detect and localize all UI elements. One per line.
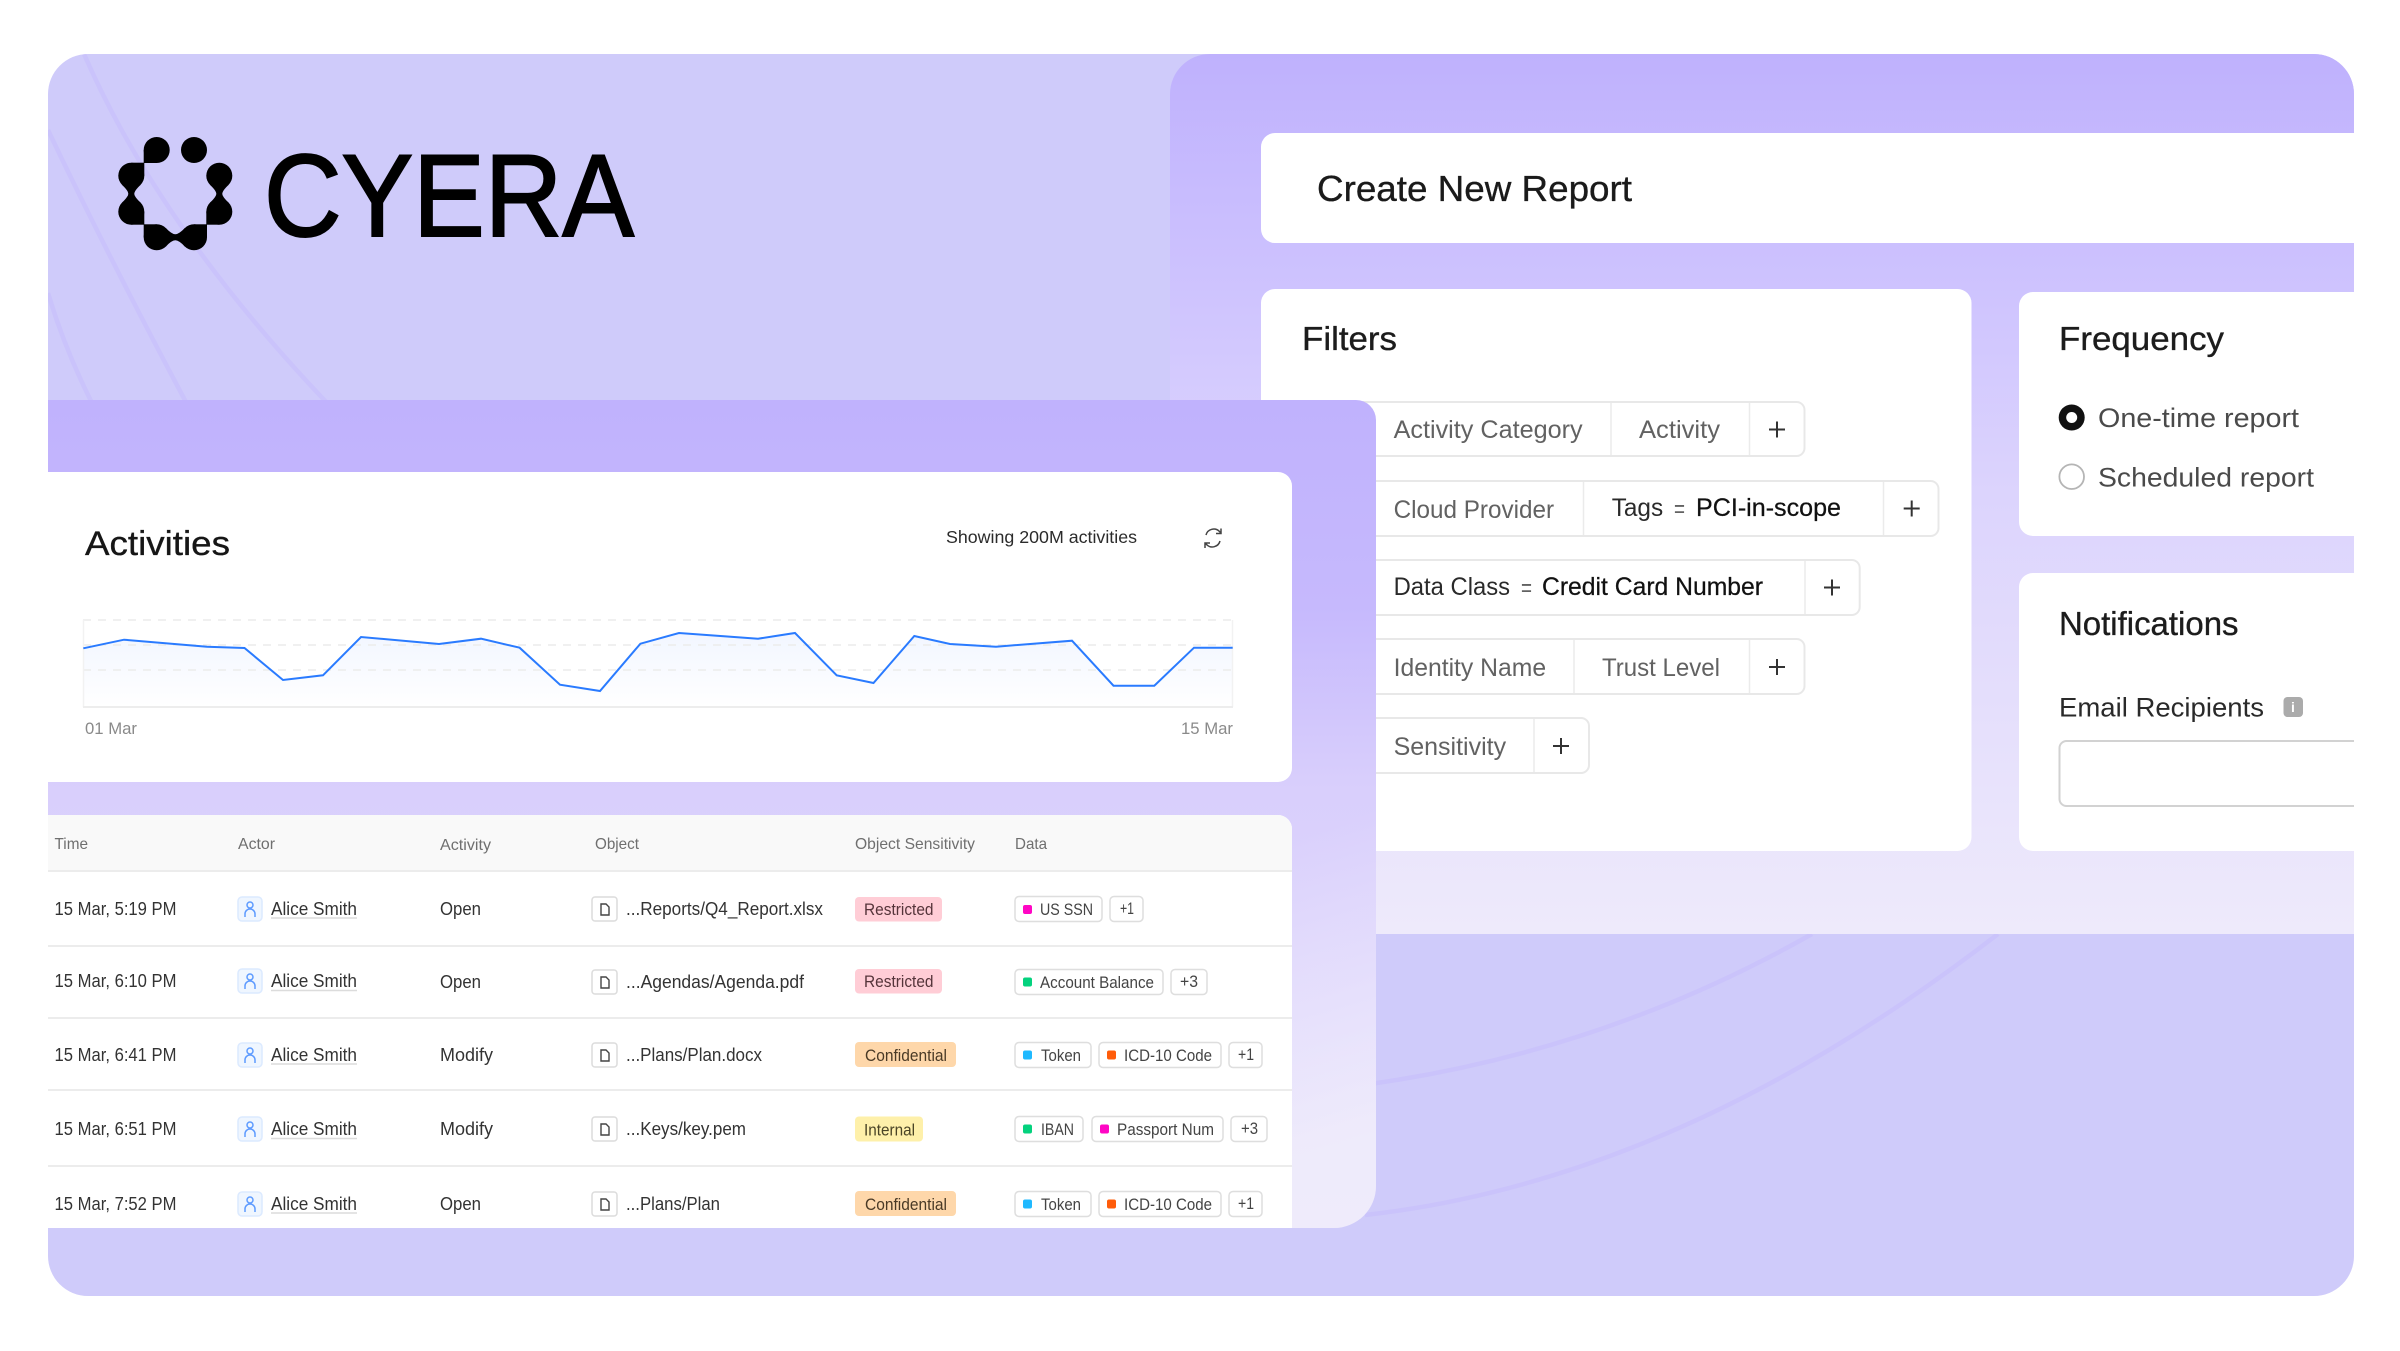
table row 2: Open (440, 972, 481, 992)
filter row 4: Trust Level (1602, 654, 1720, 682)
filter row 5: Sensitivity (1394, 733, 1507, 761)
table row 5: ...Plans/Plan (626, 1194, 720, 1214)
filter row 2: PCI-in-scope (1696, 494, 1841, 522)
icon: info badge (2284, 697, 2303, 717)
heading: create new report: Create New Report (1317, 168, 1632, 209)
heading: filters: Filters (1302, 320, 1397, 357)
table header: Time (54, 836, 88, 853)
filter row 2: = (1674, 495, 1685, 523)
axis label: start date: 01 Mar (85, 720, 138, 738)
table row 2: +3 (1180, 973, 1198, 991)
panel: activities backdrop (48, 400, 1376, 1228)
table row 4: +3 (1241, 1120, 1258, 1138)
table row 5: +1 (1238, 1195, 1254, 1213)
table row 3: 15 Mar, 6:41 PM (54, 1045, 176, 1065)
filter row 2: Cloud Provider (1394, 496, 1554, 524)
panel: activities table (48, 815, 1292, 1228)
panel: filters (1261, 289, 1972, 851)
heading: activities: Activities (85, 525, 230, 563)
filter row 4: Identity Name (1394, 654, 1546, 682)
table row 2 (54, 969, 1207, 994)
table row 4: IBAN (1041, 1121, 1074, 1139)
table row 4: 15 Mar, 6:51 PM (54, 1119, 176, 1139)
filter row 1: Activity Category (1394, 416, 1583, 444)
radio selected: one-time report: One-time report (2098, 403, 2300, 433)
background arcs top left (48, 54, 329, 405)
table row 5: Open (440, 1194, 481, 1214)
table row 4 (54, 1116, 1267, 1142)
table row 3: ...Plans/Plan.docx (626, 1045, 762, 1065)
panel: create new report header (1261, 133, 2354, 243)
table row 3: ICD-10 Code (1124, 1047, 1212, 1065)
panel: report builder backdrop (1170, 54, 2380, 934)
table header: Activity (440, 837, 491, 854)
label: email recipients: Email Recipients (2059, 692, 2264, 722)
table row 3: Confidential (865, 1047, 947, 1065)
table row 3: Token (1041, 1047, 1081, 1065)
icon: refresh (1205, 528, 1221, 548)
panel: frequency (2019, 292, 2354, 536)
table row 5: ICD-10 Code (1124, 1196, 1212, 1214)
table header: Object (595, 836, 640, 853)
table row 5: 15 Mar, 7:52 PM (54, 1194, 176, 1214)
table row 3: Alice Smith (271, 1045, 357, 1065)
table row 4: Internal (864, 1122, 915, 1140)
table row 4: Alice Smith (271, 1119, 357, 1139)
table row 2: Alice Smith (271, 971, 357, 991)
table row 5: Confidential (865, 1196, 947, 1214)
panel: notifications (2019, 573, 2380, 851)
text: showing count: Showing 200M activities (946, 527, 1137, 547)
filter row 3 (1340, 560, 1860, 615)
table row 2: Restricted (864, 973, 934, 991)
filter row 1 (1340, 402, 1804, 456)
table row 2: ...Agendas/Agenda.pdf (626, 972, 805, 992)
table row 3: Modify (440, 1045, 493, 1065)
table row 4: Modify (440, 1119, 493, 1139)
line chart (83, 620, 1234, 738)
table header: Object Sensitivity (855, 836, 975, 853)
table row 5: Alice Smith (271, 1194, 357, 1214)
background arcs bottom right (1365, 934, 1998, 1215)
filter row 3: Credit Card Number (1542, 573, 1763, 601)
logo: cyera (118, 130, 634, 261)
panel: activities chart card (48, 472, 1292, 782)
filter row 1: Activity (1639, 416, 1720, 444)
table row 2: Account Balance (1040, 974, 1154, 992)
icon: info badge: i (2291, 699, 2295, 715)
table row 1 (54, 896, 1143, 922)
filter row 2 (1340, 481, 1938, 536)
wordmark: cyera: CYERA (264, 130, 634, 261)
table row 5 (54, 1191, 1262, 1216)
table row 1: Restricted (864, 901, 934, 919)
table row 3 (54, 1042, 1262, 1068)
radio unselected: scheduled report: Scheduled report (2098, 462, 2315, 492)
table row 2: 15 Mar, 6:10 PM (54, 971, 176, 991)
table row 5: Token (1041, 1196, 1081, 1214)
filter row 3: Data Class (1394, 573, 1510, 601)
heading: notifications: Notifications (2059, 605, 2238, 642)
filter row 2: Tags (1612, 494, 1663, 522)
table row 1: US SSN (1040, 901, 1093, 919)
table header: Data (1015, 836, 1047, 853)
heading: frequency: Frequency (2059, 320, 2225, 357)
table row 1: Alice Smith (271, 899, 357, 919)
table row 4: ...Keys/key.pem (626, 1119, 746, 1139)
table row 1: +1 (1120, 900, 1134, 918)
axis label: end date: 15 Mar (1181, 720, 1234, 738)
icon: cyera mark (118, 137, 232, 250)
filter row 5 (1376, 717, 1590, 774)
table header: Actor (238, 836, 276, 853)
table row 1: ...Reports/Q4_Report.xlsx (626, 899, 823, 920)
table row 1: Open (440, 899, 481, 919)
table row 3: +1 (1238, 1046, 1254, 1064)
table header (48, 815, 1292, 871)
filter row 4 (1340, 639, 1804, 694)
table row 1: 15 Mar, 5:19 PM (54, 899, 176, 919)
filter row 3: = (1521, 574, 1532, 602)
table row 4: Passport Num (1117, 1121, 1214, 1139)
input: email recipients (2060, 741, 2380, 806)
